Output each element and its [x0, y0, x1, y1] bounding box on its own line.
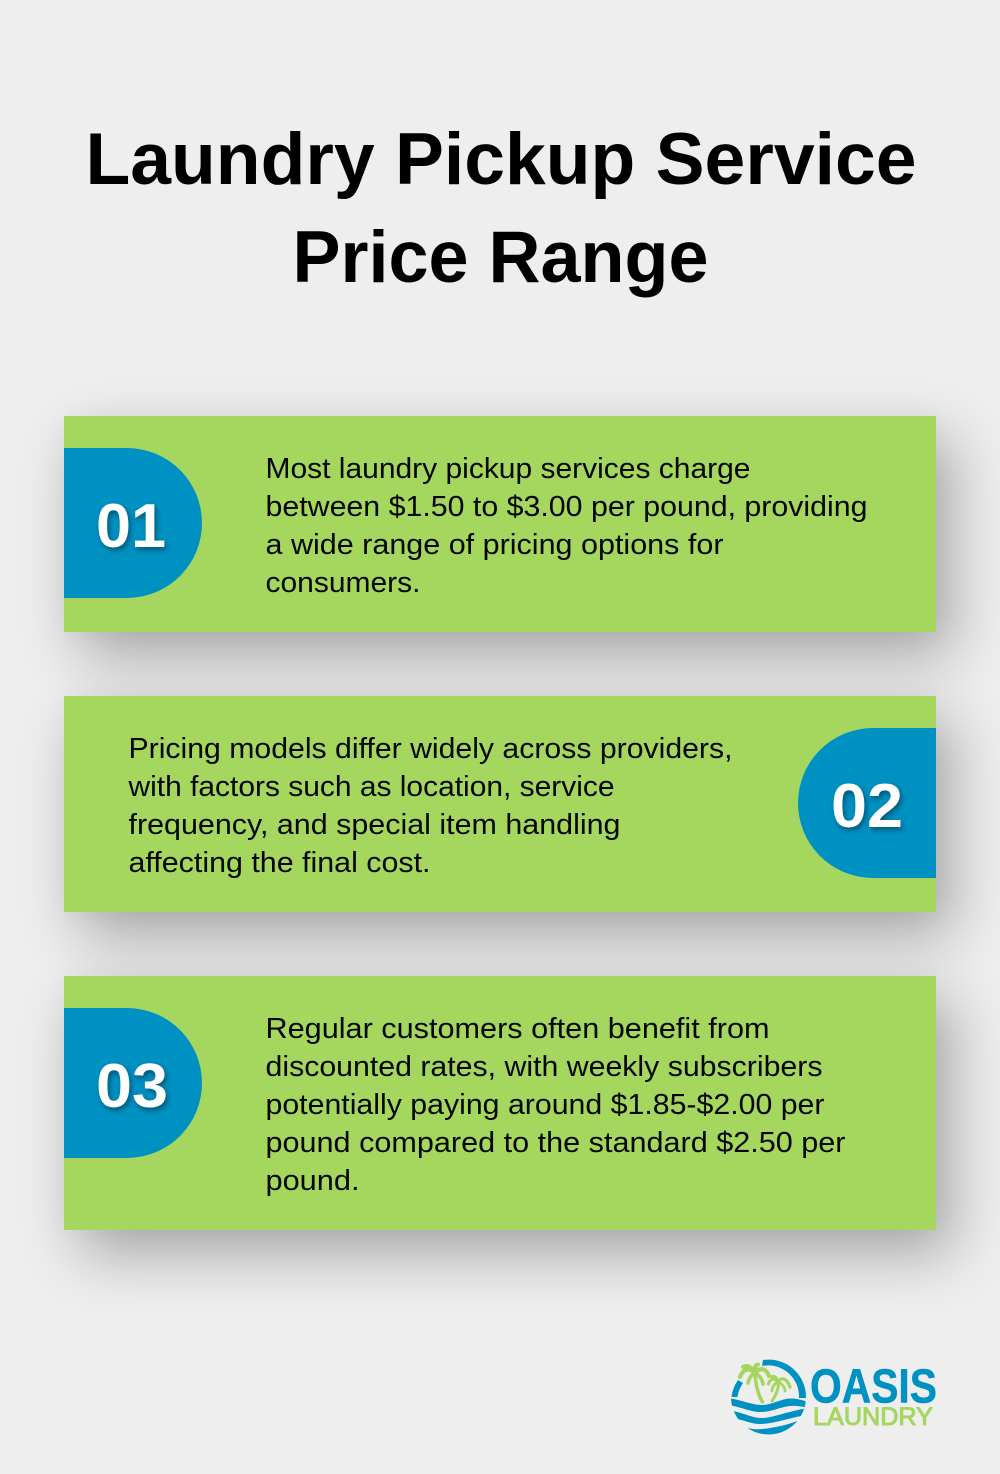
badge: 03: 03: [96, 1052, 168, 1121]
badge: 01: [64, 448, 202, 598]
title: [86, 119, 916, 298]
text: step 01 description: a wide range of pricing options for: [266, 529, 724, 561]
text: step 03 description: pound.: [266, 1165, 360, 1197]
title: Price Range: [292, 217, 708, 298]
text: step 01 description: Most laundry pickup services charge: [266, 453, 750, 485]
panel: step 01: [64, 416, 936, 632]
title: Laundry Pickup Service: [86, 119, 916, 200]
badge: 02: 02: [831, 772, 903, 841]
wordmark: LAUNDRY: LAUNDRY: [813, 1403, 933, 1431]
text: step 03 description: Regular customers often benefit from: [266, 1013, 770, 1045]
text: step 01 description: [266, 453, 868, 599]
text: step 01 description: between $1.50 to $3.00 per pound, providing: [266, 491, 868, 523]
text: step 01 description: consumers.: [266, 567, 420, 599]
text: step 02 description: Pricing models differ widely across providers,: [128, 733, 732, 765]
panel: step 02: [64, 696, 936, 912]
logo: Oasis Laundry: [731, 1360, 936, 1434]
icon: palm fronds: [740, 1364, 790, 1402]
text: step 03 description: discounted rates, with weekly subscribers: [266, 1051, 822, 1083]
text: step 02 description: affecting the final cost.: [128, 847, 430, 879]
text: step 02 description: frequency, and special item handling: [128, 809, 620, 841]
panel: step 03: [64, 976, 936, 1230]
badge: 03: [64, 1008, 202, 1158]
wordmark: OASIS: OASIS: [810, 1360, 937, 1414]
text: step 03 description: pound compared to the standard $2.50 per: [266, 1127, 846, 1159]
badge: 02: [798, 728, 936, 878]
text: step 02 description: [127, 733, 732, 879]
text: step 03 description: [266, 1013, 846, 1197]
text: step 03 description: potentially paying around $1.85-$2.00 per: [266, 1089, 825, 1121]
text: step 02 description: with factors such as location, service: [127, 771, 615, 803]
icon: palm trees and waves: [731, 1360, 806, 1434]
badge: 01: 01: [96, 492, 166, 561]
